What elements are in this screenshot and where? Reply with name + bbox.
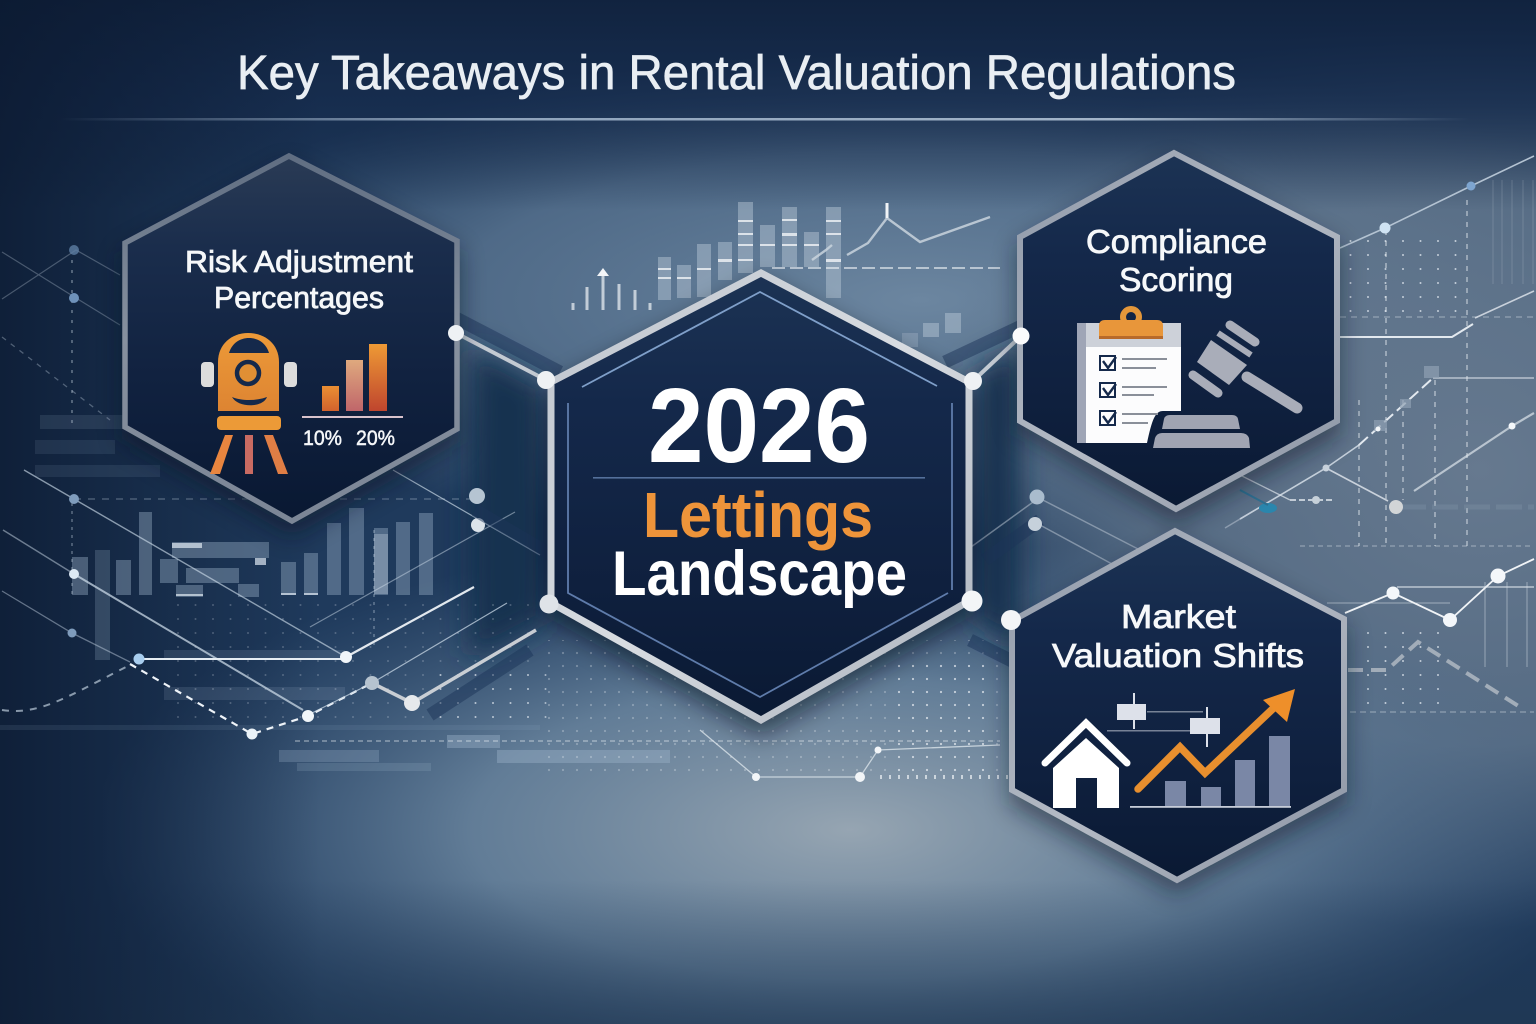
heading: Valuation Shifts xyxy=(1052,637,1304,674)
white heading: Landscape xyxy=(612,539,907,609)
bar chart: 10% and 20% xyxy=(302,344,403,450)
bar chart: 10% and 20%: 20% xyxy=(356,427,395,450)
icon: gavel xyxy=(1153,325,1297,448)
connector nodes xyxy=(448,325,1044,630)
heading: Percentages xyxy=(214,280,384,315)
background chart: top centre bars and line xyxy=(573,202,1000,347)
panel: Risk Adjustment Percentages xyxy=(122,156,460,537)
background chart: left bars and lines xyxy=(0,245,1000,771)
icon: candlesticks xyxy=(1107,693,1220,747)
panel: Market Valuation Shifts xyxy=(1009,531,1347,895)
panel: Compliance Scoring xyxy=(1017,153,1340,524)
icon: house xyxy=(1045,723,1127,808)
heading: Scoring xyxy=(1119,261,1233,298)
bar chart: 10% and 20%: 10% xyxy=(303,427,342,450)
heading: Market xyxy=(1121,598,1236,635)
background chart: right lines and grids xyxy=(1240,156,1534,712)
orange heading: Lettings xyxy=(643,479,873,551)
heading xyxy=(185,244,413,315)
heading: Risk Adjustment xyxy=(185,244,413,279)
connector lines between hexagons xyxy=(430,318,1255,715)
dark bands beside the central hexagon xyxy=(470,345,1020,660)
icon: clipboard checklist xyxy=(1077,309,1181,443)
panel: 2026 Lettings Landscape xyxy=(547,273,973,736)
background chart: lower centre grids and line xyxy=(540,640,1010,782)
heading: Compliance xyxy=(1086,223,1267,260)
icon: surveying instrument xyxy=(201,333,297,474)
chart: bars with rising arrow xyxy=(1130,689,1295,808)
title: Key Takeaways in Rental Valuation Regulations xyxy=(237,47,1236,100)
year: 2026 xyxy=(648,367,870,485)
inner outline xyxy=(568,292,952,697)
heading xyxy=(1086,223,1267,298)
heading xyxy=(1052,598,1304,674)
title rule xyxy=(60,118,1470,120)
